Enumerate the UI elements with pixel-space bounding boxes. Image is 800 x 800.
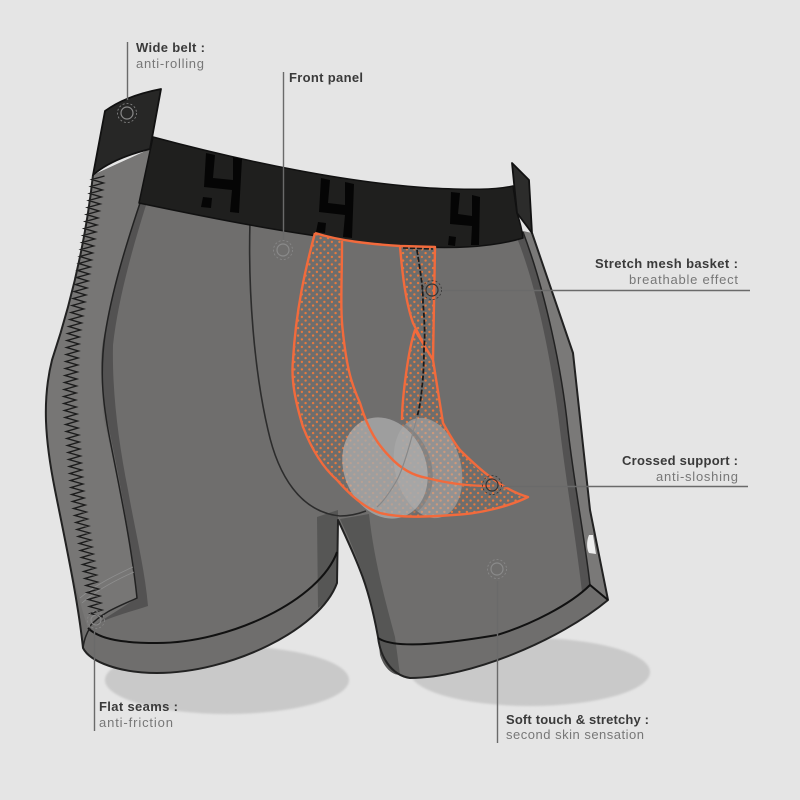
left oval shadow xyxy=(333,404,447,532)
orange basket outlines xyxy=(292,233,528,517)
label: Front panel xyxy=(289,70,363,85)
leader line xyxy=(503,486,748,488)
hotspot xyxy=(482,476,502,494)
left leg hem xyxy=(88,552,337,643)
leader line xyxy=(282,72,284,240)
garment outline xyxy=(46,175,608,678)
left seam shadow band xyxy=(90,203,148,628)
sublabel: second skin sensation xyxy=(506,727,644,742)
mesh left strap xyxy=(292,233,528,517)
left oval xyxy=(328,404,442,532)
right oval xyxy=(384,411,472,525)
logo 2 xyxy=(316,178,354,238)
callout: wide belt xyxy=(118,40,205,122)
left hem fold xyxy=(83,628,90,648)
callout: crossed support xyxy=(482,453,748,494)
left seam line xyxy=(90,203,140,626)
left side panel xyxy=(46,149,150,628)
waistband xyxy=(139,137,523,247)
logo 1 xyxy=(201,153,242,213)
label: Crossed support : xyxy=(622,453,738,468)
ground shadow: right leg xyxy=(410,638,650,706)
right side panel xyxy=(523,232,608,600)
zigzag flat seam xyxy=(64,176,104,617)
label: Stretch mesh basket : xyxy=(595,256,738,271)
label: Flat seams : xyxy=(99,699,178,714)
sublabel: anti-sloshing xyxy=(656,469,738,484)
hotspot xyxy=(88,612,104,628)
sublabel: anti-rolling xyxy=(136,56,204,71)
hotspot xyxy=(118,104,136,122)
right seam shadow band xyxy=(517,232,590,592)
mesh basket xyxy=(292,233,528,532)
right leg inner shadow xyxy=(340,514,400,675)
front panel seam xyxy=(250,222,366,516)
leader line xyxy=(126,42,128,100)
top dashed stitching xyxy=(403,248,433,249)
right seam line xyxy=(523,232,590,585)
left leg inner shadow xyxy=(317,510,338,608)
hotspot xyxy=(422,280,442,300)
faint stitching through ovals xyxy=(377,417,417,507)
right leg hem xyxy=(378,585,608,644)
sublabel: anti-friction xyxy=(99,715,173,730)
sublabel: breathable effect xyxy=(629,272,738,287)
garment body xyxy=(46,149,608,678)
side seam double stitch xyxy=(80,567,134,603)
mesh right strap xyxy=(400,246,528,497)
callout: flat seams xyxy=(88,612,178,731)
callout: soft touch xyxy=(488,560,649,743)
leader line xyxy=(443,290,750,292)
callout: front panel xyxy=(274,70,363,260)
callout: stretch mesh basket xyxy=(422,256,750,300)
leader line xyxy=(94,627,96,731)
hotspot xyxy=(274,240,292,260)
dashed stitching xyxy=(417,250,425,417)
white tag xyxy=(587,535,596,554)
back waistband flap left xyxy=(93,89,161,175)
leader line xyxy=(496,581,498,743)
boxer brief illustration xyxy=(46,89,608,678)
ground shadow: left leg xyxy=(105,646,349,714)
logo 3 xyxy=(448,192,480,246)
back waistband flap right xyxy=(512,163,532,233)
label: Wide belt : xyxy=(136,40,205,55)
label: Soft touch & stretchy : xyxy=(506,712,649,727)
hotspot xyxy=(488,560,506,578)
